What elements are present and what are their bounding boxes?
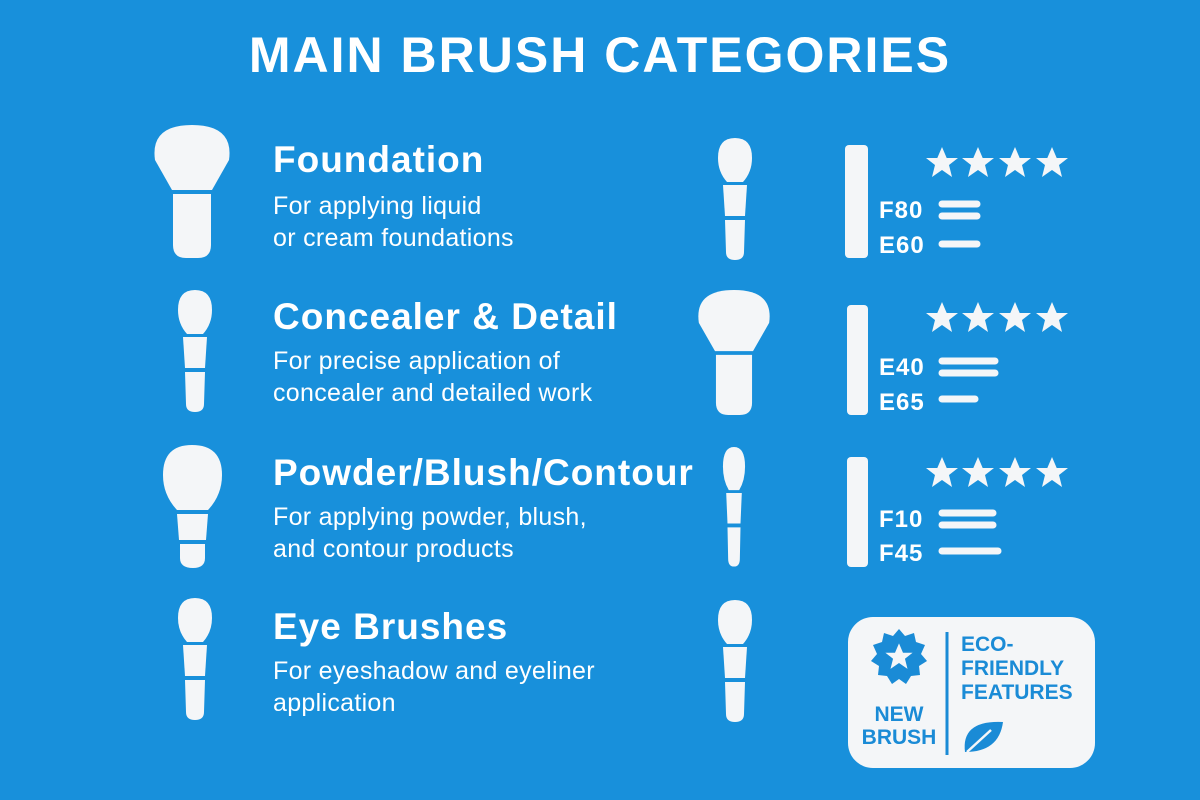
bar row1	[845, 145, 868, 258]
badge text: eco: FEATURES	[961, 681, 1073, 704]
icon: eye brush	[178, 598, 212, 720]
text: concealer desc: concealer and detailed work	[273, 379, 592, 407]
label F10: F10	[879, 506, 923, 533]
badge text: new brush	[862, 703, 936, 749]
icon: brush row1	[718, 138, 752, 260]
bar row3	[847, 457, 868, 567]
stars row1	[926, 147, 1068, 177]
label E60: E60	[879, 232, 925, 259]
text: foundation desc: or cream foundations	[273, 224, 514, 252]
stars row2	[926, 302, 1068, 332]
text: foundation desc: For applying liquid	[273, 192, 482, 220]
badge text: new brush: BRUSH	[862, 726, 936, 749]
heading: powder: Powder/Blush/Contour	[273, 452, 694, 493]
icon: concealer brush	[178, 290, 212, 412]
icon: foundation brush	[154, 125, 230, 258]
text: powder desc: and contour products	[273, 535, 514, 563]
label F80: F80	[879, 197, 923, 224]
heading: concealer: Concealer & Detail	[273, 296, 618, 337]
lines row1	[942, 204, 977, 244]
icon: brush row4	[718, 600, 752, 722]
icon: big brush row2	[698, 290, 770, 415]
text: concealer desc: For precise application of	[273, 347, 560, 375]
badge	[848, 617, 1095, 768]
icon: powder brush	[163, 445, 222, 568]
title: MAIN BRUSH CATEGORIES	[249, 27, 951, 83]
lines row2	[942, 361, 995, 399]
icon: thin brush row3	[723, 447, 745, 567]
stars row3	[926, 457, 1068, 487]
text: eye desc	[273, 657, 595, 717]
icon: leaf	[965, 722, 1003, 752]
label E40: E40	[879, 354, 925, 381]
heading: foundation: Foundation	[273, 139, 484, 180]
badge text: eco: FRIENDLY	[961, 657, 1064, 680]
badge text: new brush: NEW	[874, 703, 924, 726]
text: concealer desc	[273, 347, 592, 407]
text: eye desc: For eyeshadow and eyeliner	[273, 657, 595, 685]
icon: new brush seal	[871, 629, 927, 684]
label E65: E65	[879, 389, 925, 416]
text: foundation desc	[273, 192, 514, 252]
bar row2	[847, 305, 868, 415]
text: powder desc	[273, 503, 587, 563]
text: powder desc: For applying powder, blush,	[273, 503, 587, 531]
badge text: eco	[961, 633, 1073, 704]
text: eye desc: application	[273, 689, 396, 717]
heading: eye: Eye Brushes	[273, 606, 508, 647]
badge text: eco: ECO-	[961, 633, 1014, 656]
lines row3	[942, 513, 998, 551]
label F45: F45	[879, 540, 923, 567]
